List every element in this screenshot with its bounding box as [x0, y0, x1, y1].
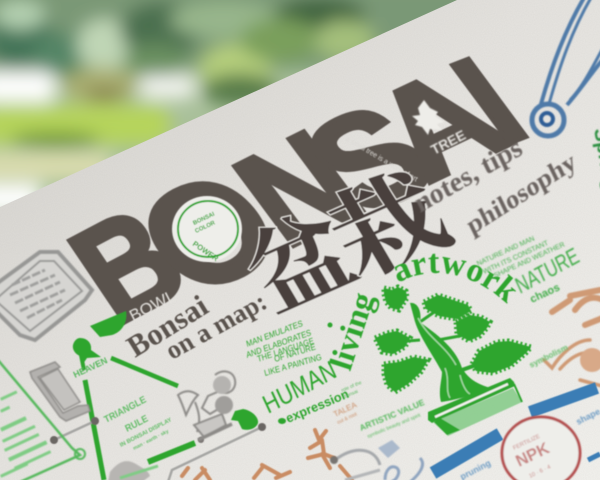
trunk	[410, 303, 490, 402]
orange bonsai right	[544, 290, 600, 386]
green node	[231, 409, 258, 430]
man emulates text	[245, 318, 323, 378]
NPK stamp: FERTILIZE	[512, 434, 541, 452]
man emulates text: AND ELABORATES	[245, 328, 313, 360]
letter S: S	[275, 77, 466, 242]
letter I: I	[427, 32, 552, 171]
triangle rule label	[102, 393, 173, 452]
badge in O: BONSAI	[192, 211, 216, 227]
green bonsai tree	[375, 287, 531, 436]
talea label: TALEA	[332, 400, 359, 419]
label TREE and tree icon in A	[412, 100, 468, 158]
heaven label: HEAVEN	[72, 355, 109, 380]
subtitle right: notes, tips	[410, 132, 527, 219]
label BOWL: BOWL	[126, 286, 179, 326]
talea label: cut & root	[336, 411, 359, 426]
blue small labels	[458, 406, 600, 480]
triangle rule diagram	[50, 338, 266, 480]
triangle rule label: IN BONSAI DISPLAY	[119, 417, 173, 449]
kanji bon: 盆	[226, 196, 376, 332]
pot	[428, 378, 515, 423]
artistic value: ARTISTIC VALUE	[358, 397, 426, 433]
living artwork heading: artwork	[394, 253, 516, 304]
man emulates text: THE LANGUAGE	[256, 336, 315, 364]
subtitle right: philosophy	[462, 146, 580, 240]
nature chaos: NATURE	[511, 242, 583, 299]
badge in O	[172, 196, 242, 263]
NPK stamp: NPK	[513, 438, 552, 471]
NPK stamp: 10 · 6 · 4	[528, 464, 553, 480]
NPK stamp	[502, 417, 580, 480]
letter B: B	[45, 179, 211, 352]
left green rail and text	[0, 360, 158, 480]
lower left grey bonsai	[108, 461, 150, 480]
living artwork heading	[323, 253, 516, 374]
blue bands	[433, 388, 600, 473]
grey connector	[54, 421, 95, 440]
orange plant lower	[182, 430, 352, 480]
letter A: A	[341, 43, 538, 208]
triangle line right	[111, 358, 178, 386]
nature chaos: chaos	[528, 282, 562, 306]
letter O: O	[106, 141, 312, 325]
kanji title	[226, 155, 467, 332]
column icon	[30, 362, 90, 421]
nature and man text: SHAPE AND WEATHER	[493, 241, 566, 280]
heaven node	[73, 338, 101, 364]
blurred garden background	[0, 0, 600, 240]
subtitle left: on a map:	[160, 287, 272, 365]
kanji sai: 栽	[311, 155, 467, 297]
grey long connector	[168, 427, 262, 480]
green bar	[148, 443, 195, 462]
title BONSAI	[45, 32, 552, 352]
grey tree and figure	[178, 371, 235, 440]
trunk highlights	[418, 318, 470, 398]
subtitle left: Bonsai	[121, 288, 214, 364]
small text in S: a small tree is a work of art	[344, 136, 419, 184]
living artwork heading: living	[323, 288, 382, 374]
human expression: HUMAN	[259, 356, 341, 420]
badge in O: POWER	[191, 239, 220, 263]
triangle rule label: TRIANGLE	[102, 393, 148, 425]
ornamental plaque	[0, 252, 92, 340]
man emulates text: OF NATURE	[273, 342, 317, 364]
label TREE and tree icon in A: TREE	[428, 127, 468, 158]
letter N: N	[208, 103, 390, 275]
blue tool	[532, 0, 600, 136]
badge in O: COLOR	[194, 220, 217, 235]
foliage	[375, 287, 531, 392]
man emulates text: LIKE A PAINTING	[263, 352, 323, 378]
triangle line down	[85, 380, 104, 480]
nature and man text: NATURE AND MAN	[476, 235, 536, 268]
symbolism label: symbolism	[528, 343, 569, 370]
man emulates text: MAN EMULATES	[245, 318, 304, 349]
human expression: bonsai	[343, 389, 359, 400]
artistic value: symbolic beauty and spirit	[366, 412, 422, 440]
triangle rule label: RULE	[123, 412, 150, 434]
triangle rule label: man · earth · sky	[132, 428, 170, 452]
human expression: role of the	[340, 380, 363, 394]
subtitle right	[410, 132, 580, 240]
nature and man text: WITH ITS CONSTANT	[482, 240, 550, 276]
green bowl icon	[90, 311, 126, 337]
human expression: expression	[284, 387, 351, 426]
grey-blue scissors	[330, 440, 423, 480]
